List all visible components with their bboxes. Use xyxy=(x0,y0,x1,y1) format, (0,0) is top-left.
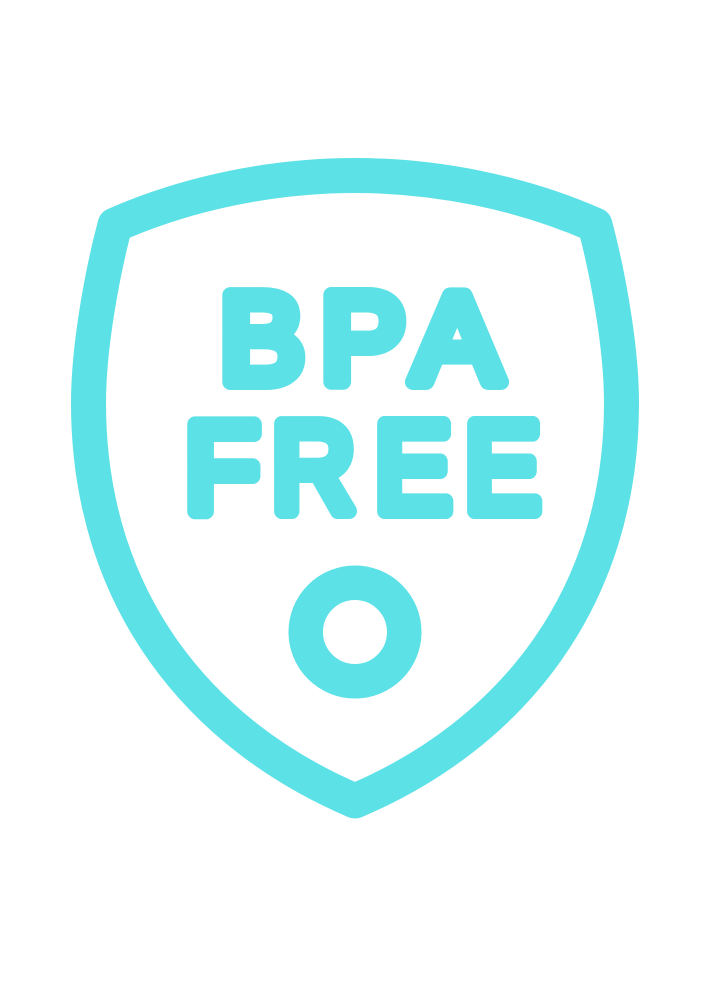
heading: BPA: A xyxy=(413,268,501,409)
heading: BPA: B xyxy=(220,268,304,409)
icon: ring xyxy=(306,583,404,681)
icon: shield outline xyxy=(88,176,622,801)
heading: FREE: R xyxy=(272,397,355,538)
heading: BPA xyxy=(220,268,501,409)
heading: FREE: E xyxy=(375,397,451,538)
heading: FREE: F xyxy=(185,397,259,538)
heading: FREE xyxy=(185,397,540,538)
heading: BPA: P xyxy=(321,268,405,409)
heading: FREE: E xyxy=(465,397,540,538)
